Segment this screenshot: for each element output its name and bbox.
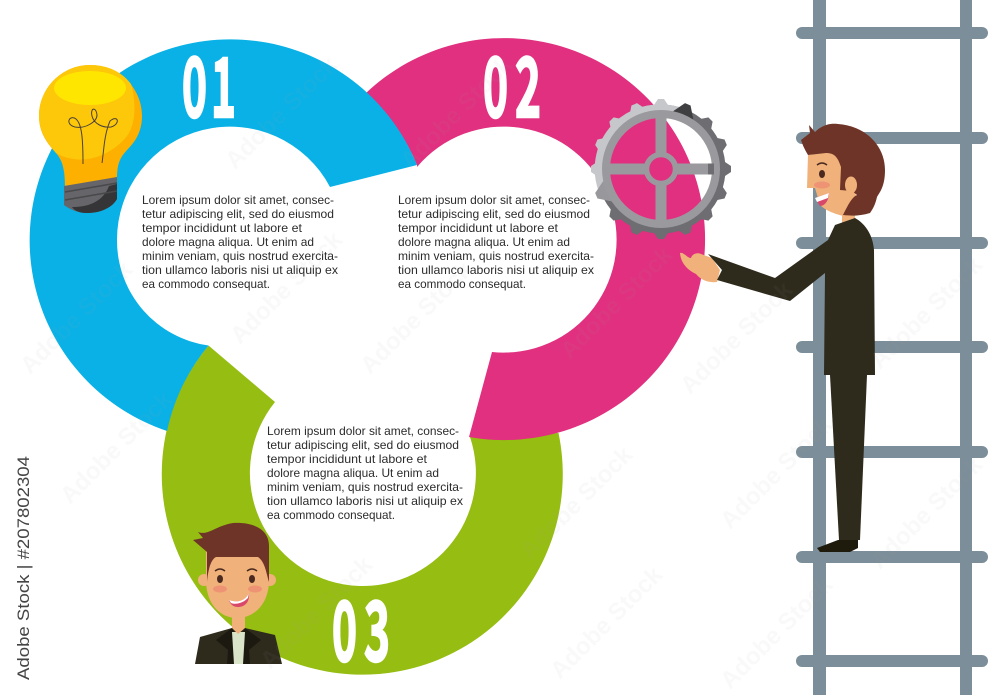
watermarks: Adobe Stock: [395, 51, 518, 174]
face: [206, 550, 269, 618]
watermarks: Adobe Stock: [15, 256, 138, 379]
neck: [842, 208, 855, 224]
text block 01: Lorem ipsum dolor sit amet, consec-: [142, 193, 334, 207]
eye: [819, 170, 825, 178]
text block 03: tion ullamco laboris nisi ut aliquip ex: [267, 494, 463, 508]
smile: [229, 593, 249, 607]
jacket: [195, 628, 282, 664]
eyes: [217, 575, 223, 583]
ladder: [796, 0, 988, 695]
watermarks: Adobe Stock: [865, 251, 988, 374]
ear: [845, 176, 857, 194]
blue ring segment 01: [30, 39, 417, 431]
hair: [193, 523, 269, 582]
text block 02: Lorem ipsum dolor sit amet, consec-: [398, 193, 590, 207]
gear rim: [606, 114, 716, 224]
text block 02: tetur adipiscing elit, sed do eiusmod: [398, 207, 590, 221]
stock credit: Adobe Stock | #207802304: [14, 456, 33, 680]
watermarks: Adobe Stock: [715, 411, 838, 534]
shoe: [817, 540, 858, 552]
green ring segment 03: [162, 346, 563, 675]
blush: [814, 182, 830, 188]
ears: [198, 574, 210, 586]
text block 01: [142, 193, 338, 291]
legs: [830, 375, 867, 540]
number 01: 1: [211, 22, 236, 141]
hair: [801, 124, 885, 216]
eyebrow: [817, 163, 827, 165]
watermarks: Adobe Stock: [220, 51, 343, 174]
neck: [232, 612, 245, 634]
watermarks: Adobe Stock: [675, 276, 798, 399]
text block 02: dolore magna aliqua. Ut enim ad: [398, 235, 570, 249]
watermarks: Adobe Stock: [255, 551, 378, 674]
text block 01: dolore magna aliqua. Ut enim ad: [142, 235, 314, 249]
watermarks: Adobe Stock: [555, 241, 678, 364]
watermarks: Adobe Stock: [865, 451, 988, 574]
gear base band: [601, 109, 721, 229]
icon: light bulb: [39, 65, 142, 213]
number 03: 0: [332, 566, 357, 685]
watermarks: Adobe Stock: [355, 256, 478, 379]
watermarks: Adobe Stock: [55, 386, 178, 509]
watermarks: Adobe Stock: [715, 571, 838, 694]
icon: gear: [591, 99, 731, 239]
light teeth: [591, 99, 672, 180]
eyebrows: [215, 569, 257, 571]
dark teeth: [604, 100, 731, 239]
face: [807, 150, 857, 216]
text block 03: minim veniam, quis nostrud exercita-: [267, 480, 463, 494]
number 02: 2: [515, 22, 541, 141]
pink ring segment 02: [366, 38, 705, 440]
text block 02: tempor incididunt ut labore et: [398, 221, 559, 235]
text block 02: tion ullamco laboris nisi ut aliquip ex: [398, 263, 594, 277]
jacket and arm: [708, 218, 875, 375]
text block 01: minim veniam, quis nostrud exercita-: [142, 249, 338, 263]
number 03: 3: [364, 566, 390, 685]
number 02: 0: [483, 22, 508, 141]
hand: [680, 253, 720, 282]
text block 03: tetur adipiscing elit, sed do eiusmod: [267, 438, 459, 452]
text block 02: ea commodo consequat.: [398, 277, 526, 291]
mouth: [815, 193, 829, 206]
watermarks: Adobe Stock: [545, 561, 668, 684]
text block 01: ea commodo consequat.: [142, 277, 270, 291]
text block 03: [267, 424, 463, 522]
number 01: 0: [182, 22, 207, 141]
text block 03: dolore magna aliqua. Ut enim ad: [267, 466, 439, 480]
text block 01: tion ullamco laboris nisi ut aliquip ex: [142, 263, 338, 277]
watermarks: Adobe Stock: [225, 226, 348, 349]
text block 02: [398, 193, 594, 291]
text block 03: ea commodo consequat.: [267, 508, 395, 522]
mid teeth: [592, 181, 612, 206]
blush: [213, 586, 227, 592]
shirt: [232, 632, 245, 664]
small businessman portrait: [193, 523, 282, 664]
text block 02: minim veniam, quis nostrud exercita-: [398, 249, 594, 263]
man on ladder: [680, 124, 885, 552]
text block 01: tempor incididunt ut labore et: [142, 221, 303, 235]
watermarks: Adobe Stock: [515, 441, 638, 564]
text block 01: tetur adipiscing elit, sed do eiusmod: [142, 207, 334, 221]
text block 03: tempor incididunt ut labore et: [267, 452, 428, 466]
lapels: [216, 628, 261, 664]
gear hub: [646, 154, 676, 184]
text block 03: Lorem ipsum dolor sit amet, consec-: [267, 424, 459, 438]
gear spokes: [608, 115, 714, 223]
